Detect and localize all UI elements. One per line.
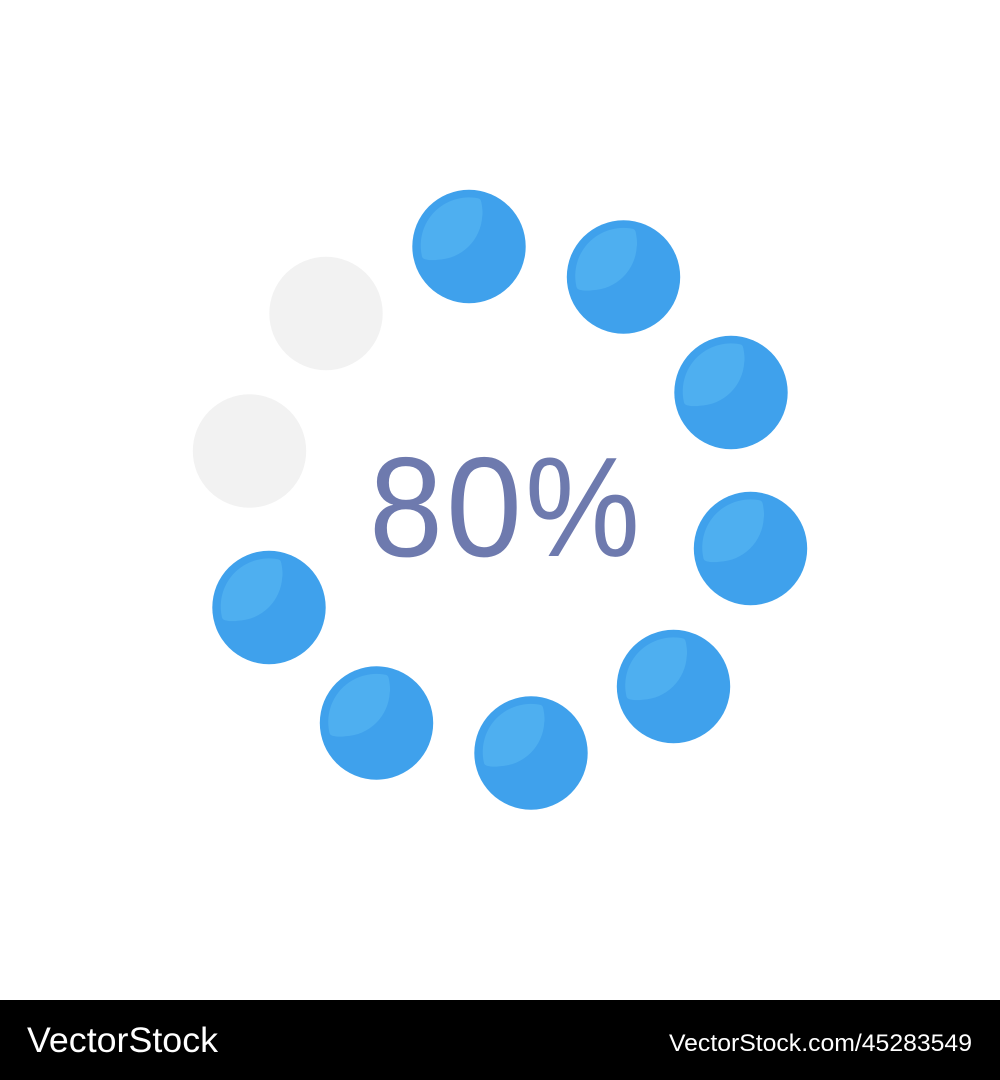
watermark logo text: VectorStock	[27, 1021, 219, 1060]
dot 3: filled blue	[674, 336, 788, 449]
dot 5: filled blue	[617, 630, 730, 743]
watermark image id: VectorStock.com/45283549	[669, 1030, 972, 1057]
percentage label	[369, 428, 640, 587]
dot 7: filled blue	[320, 666, 433, 780]
dot 9: empty grey	[193, 394, 306, 508]
dot 8: filled blue	[212, 551, 326, 664]
dot 2: filled blue	[567, 220, 680, 334]
percentage label: 0	[446, 428, 522, 587]
dot 4: filled blue	[694, 492, 807, 605]
percentage label: 8	[369, 428, 443, 587]
watermark bar	[0, 1000, 1000, 1080]
dot 6: filled blue	[474, 696, 588, 810]
dot 1: filled blue	[412, 190, 526, 303]
percentage label: %	[525, 428, 640, 587]
dot 10: empty grey	[269, 257, 383, 370]
